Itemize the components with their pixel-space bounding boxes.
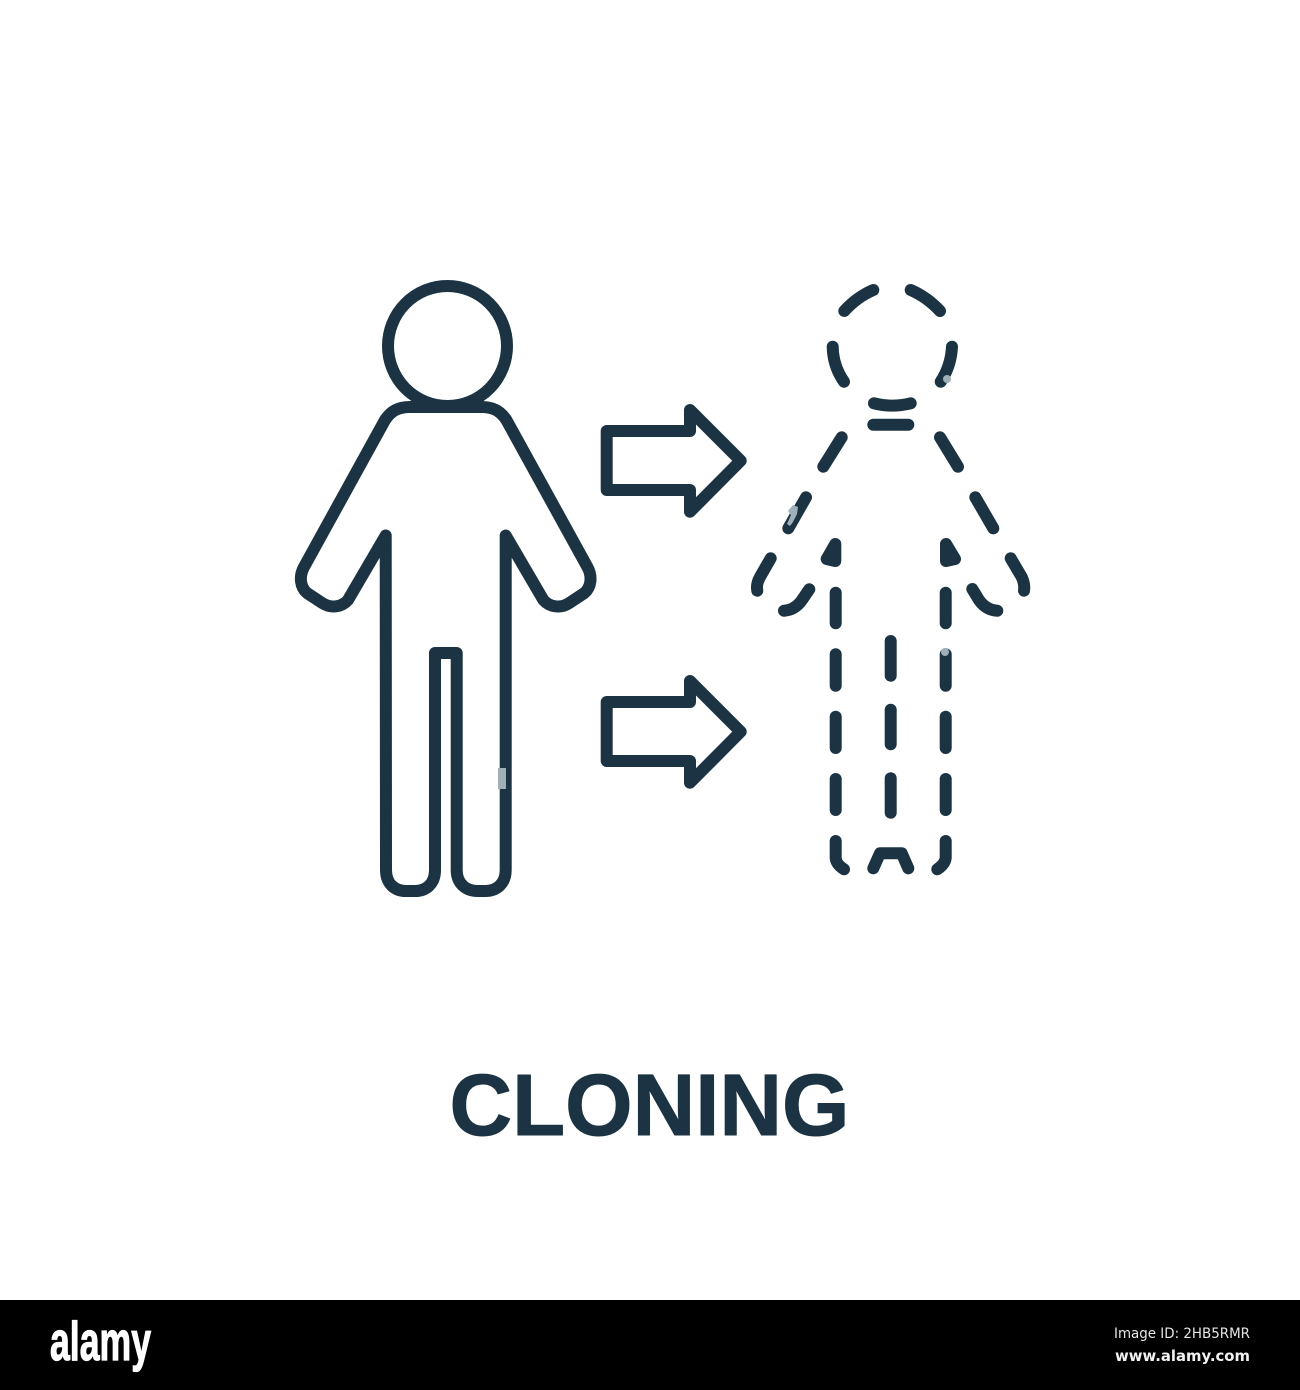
arrow: top [607, 410, 741, 512]
logo: alamy: alamy [50, 1310, 151, 1372]
image id: Image ID: 2HB5RMR [1114, 1326, 1250, 1342]
title: CLONING: CLONING [450, 1057, 850, 1154]
arrow: bottom [607, 681, 741, 783]
website: www.alamy.com [1115, 1347, 1250, 1365]
icon: solid-outline person [301, 286, 591, 891]
icon: dashed clone figure [757, 290, 1024, 869]
footer bar [0, 1300, 1300, 1390]
watermark specks [498, 375, 951, 789]
